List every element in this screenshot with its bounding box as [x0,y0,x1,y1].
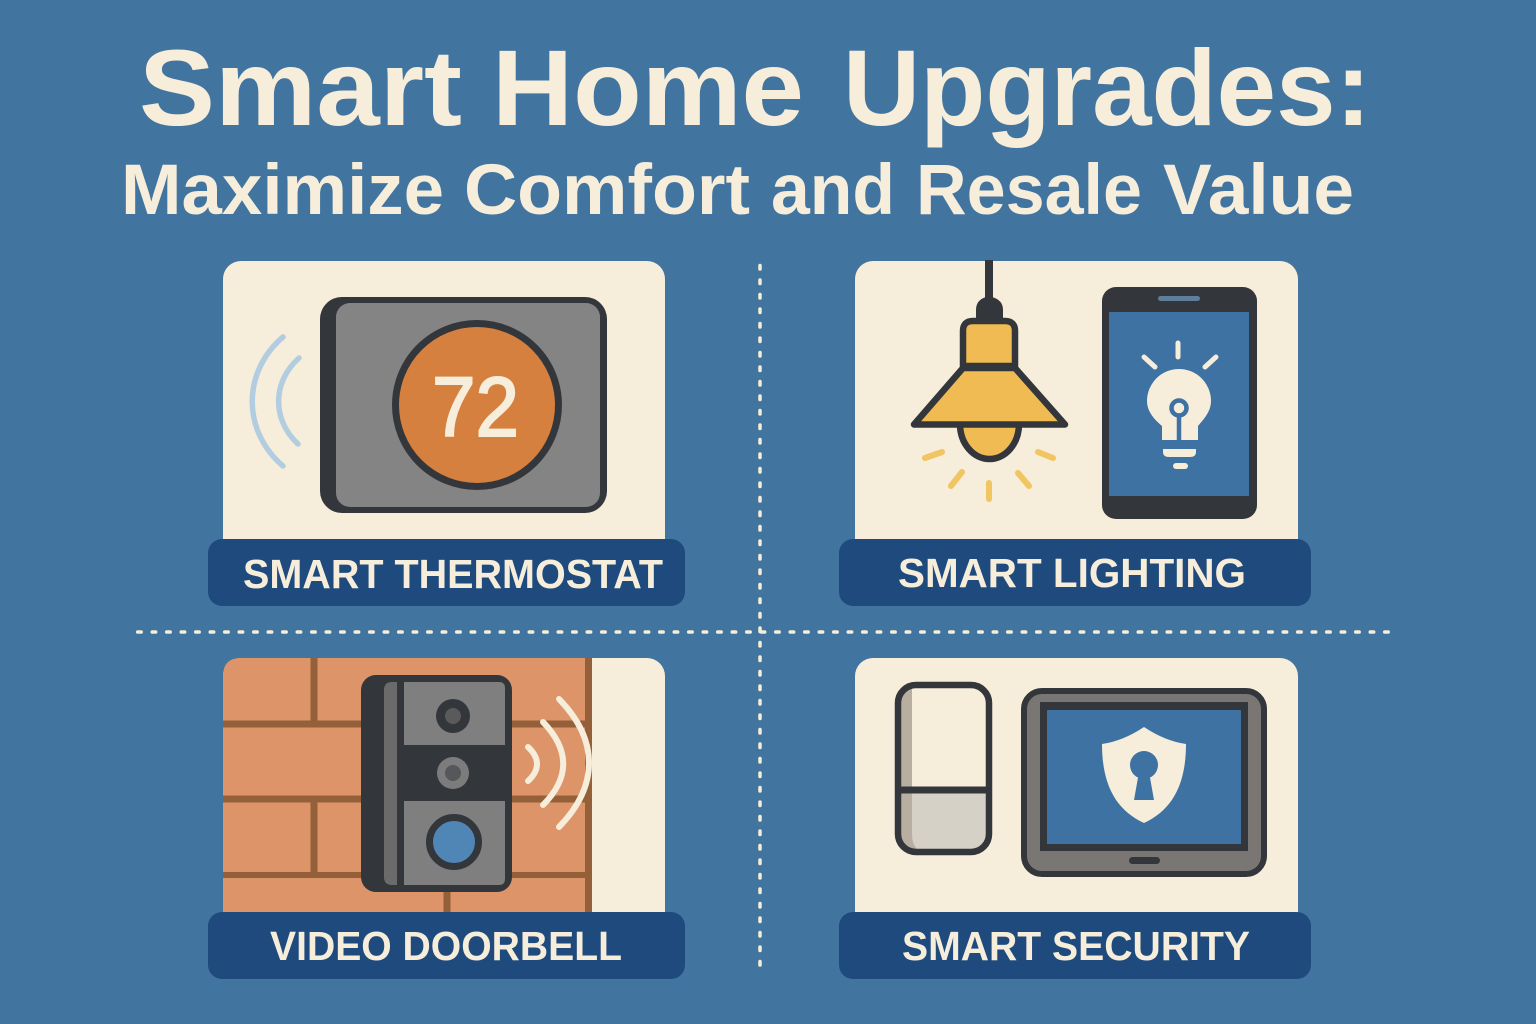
title: and [771,151,895,230]
label: smart security: SMART SECURITY [902,923,1250,969]
label: video doorbell [208,912,685,979]
title: Smart [139,27,462,148]
title: Value [1163,151,1354,230]
icon: sound waves [528,699,589,827]
icon: tablet with shield [1024,691,1264,874]
panel: smart thermostat [208,261,685,606]
icon: thermostat: 72 [432,360,519,454]
icon: thermostat [320,297,607,513]
label: smart thermostat [208,539,685,606]
icon: pendant lamp [914,260,1065,499]
title: Upgrades: [843,27,1371,148]
title: Maximize [121,151,444,230]
label: video doorbell: VIDEO DOORBELL [270,923,622,969]
label: smart security [839,912,1311,979]
label: smart lighting: SMART LIGHTING [898,550,1246,596]
title: Home [492,27,804,148]
icon: door sensor [898,685,989,852]
title: Comfort [464,151,750,230]
icon: phone with bulb [1102,287,1257,519]
panel: smart security [839,658,1311,979]
icon: doorbell [361,675,512,892]
title: Resale [916,151,1142,230]
title [121,27,1371,230]
brick wall [223,658,592,912]
icon: signal waves [252,337,299,466]
label: smart thermostat: SMART THERMOSTAT [243,551,663,597]
label: smart lighting [839,539,1311,606]
panel: smart lighting [839,260,1311,606]
panel: video doorbell [208,658,685,979]
